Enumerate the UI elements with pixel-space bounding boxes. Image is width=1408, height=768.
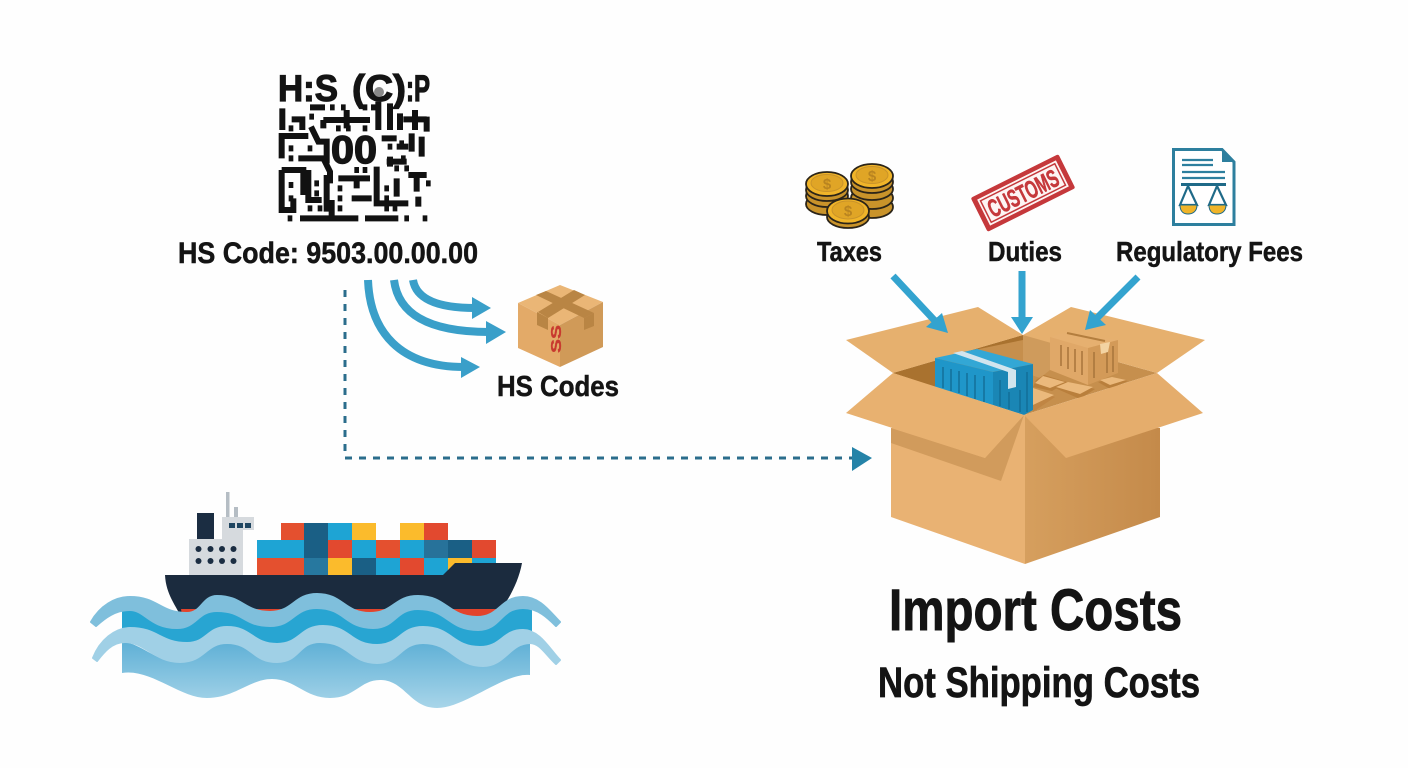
large open cardboard box [846, 307, 1205, 564]
icon: coins: $ [823, 176, 832, 193]
box body left face [891, 415, 1025, 564]
back right flap [1023, 307, 1205, 373]
icon: small cardboard box [518, 285, 603, 367]
arrow: fees into box [1085, 277, 1138, 330]
box interior [893, 335, 1157, 415]
red waterline [181, 609, 498, 621]
subheading: Not Shipping Costs: Not Shipping Costs [878, 659, 1200, 707]
icon: coins: $ [868, 168, 877, 185]
ship superstructure [189, 492, 254, 575]
icon: customs stamp: CUSTOMS [983, 164, 1064, 223]
front right flap [1024, 373, 1203, 458]
blue container [935, 349, 1033, 415]
arrow: taxes into box [893, 276, 948, 333]
HS code label: HS Code: 9503.00.00.00 [178, 237, 478, 270]
icon: regulatory document [1174, 148, 1235, 224]
QR-style HS code graphic: :P [406, 68, 430, 109]
QR-style HS code graphic [278, 68, 431, 220]
upper wave band [91, 594, 560, 630]
back left flap [846, 307, 1023, 373]
QR-style HS code graphic: H:S [278, 68, 338, 109]
mid water [122, 604, 532, 655]
box body right face [1025, 415, 1160, 564]
QR-style HS code graphic: 00 [331, 129, 377, 172]
dashed arrow to import box [345, 290, 872, 471]
QR-style HS code graphic: (C) [352, 68, 406, 109]
icon: coins [806, 164, 893, 228]
icon: customs stamp [971, 154, 1075, 232]
Duties label: Duties [988, 236, 1062, 267]
wooden crate [1050, 332, 1118, 385]
flap shadow [891, 415, 1024, 481]
container ship [165, 492, 522, 621]
curved arrows to HS Codes box [368, 280, 506, 378]
ocean waves [91, 594, 560, 708]
icon: small cardboard box: SS [548, 325, 565, 353]
heading: Import Costs: Import Costs [889, 578, 1182, 643]
front left flap [846, 373, 1024, 458]
pallets [1033, 375, 1128, 412]
containers [257, 523, 496, 576]
arrow: duties into box [1011, 271, 1033, 334]
Taxes label: Taxes [817, 236, 882, 267]
Regulatory Fees label: Regulatory Fees [1116, 236, 1303, 267]
deep water gradient [122, 642, 530, 708]
hull [165, 563, 522, 621]
HS Codes label: HS Codes [497, 371, 619, 403]
icon: coins: $ [844, 203, 853, 220]
lower wave band [93, 626, 560, 666]
